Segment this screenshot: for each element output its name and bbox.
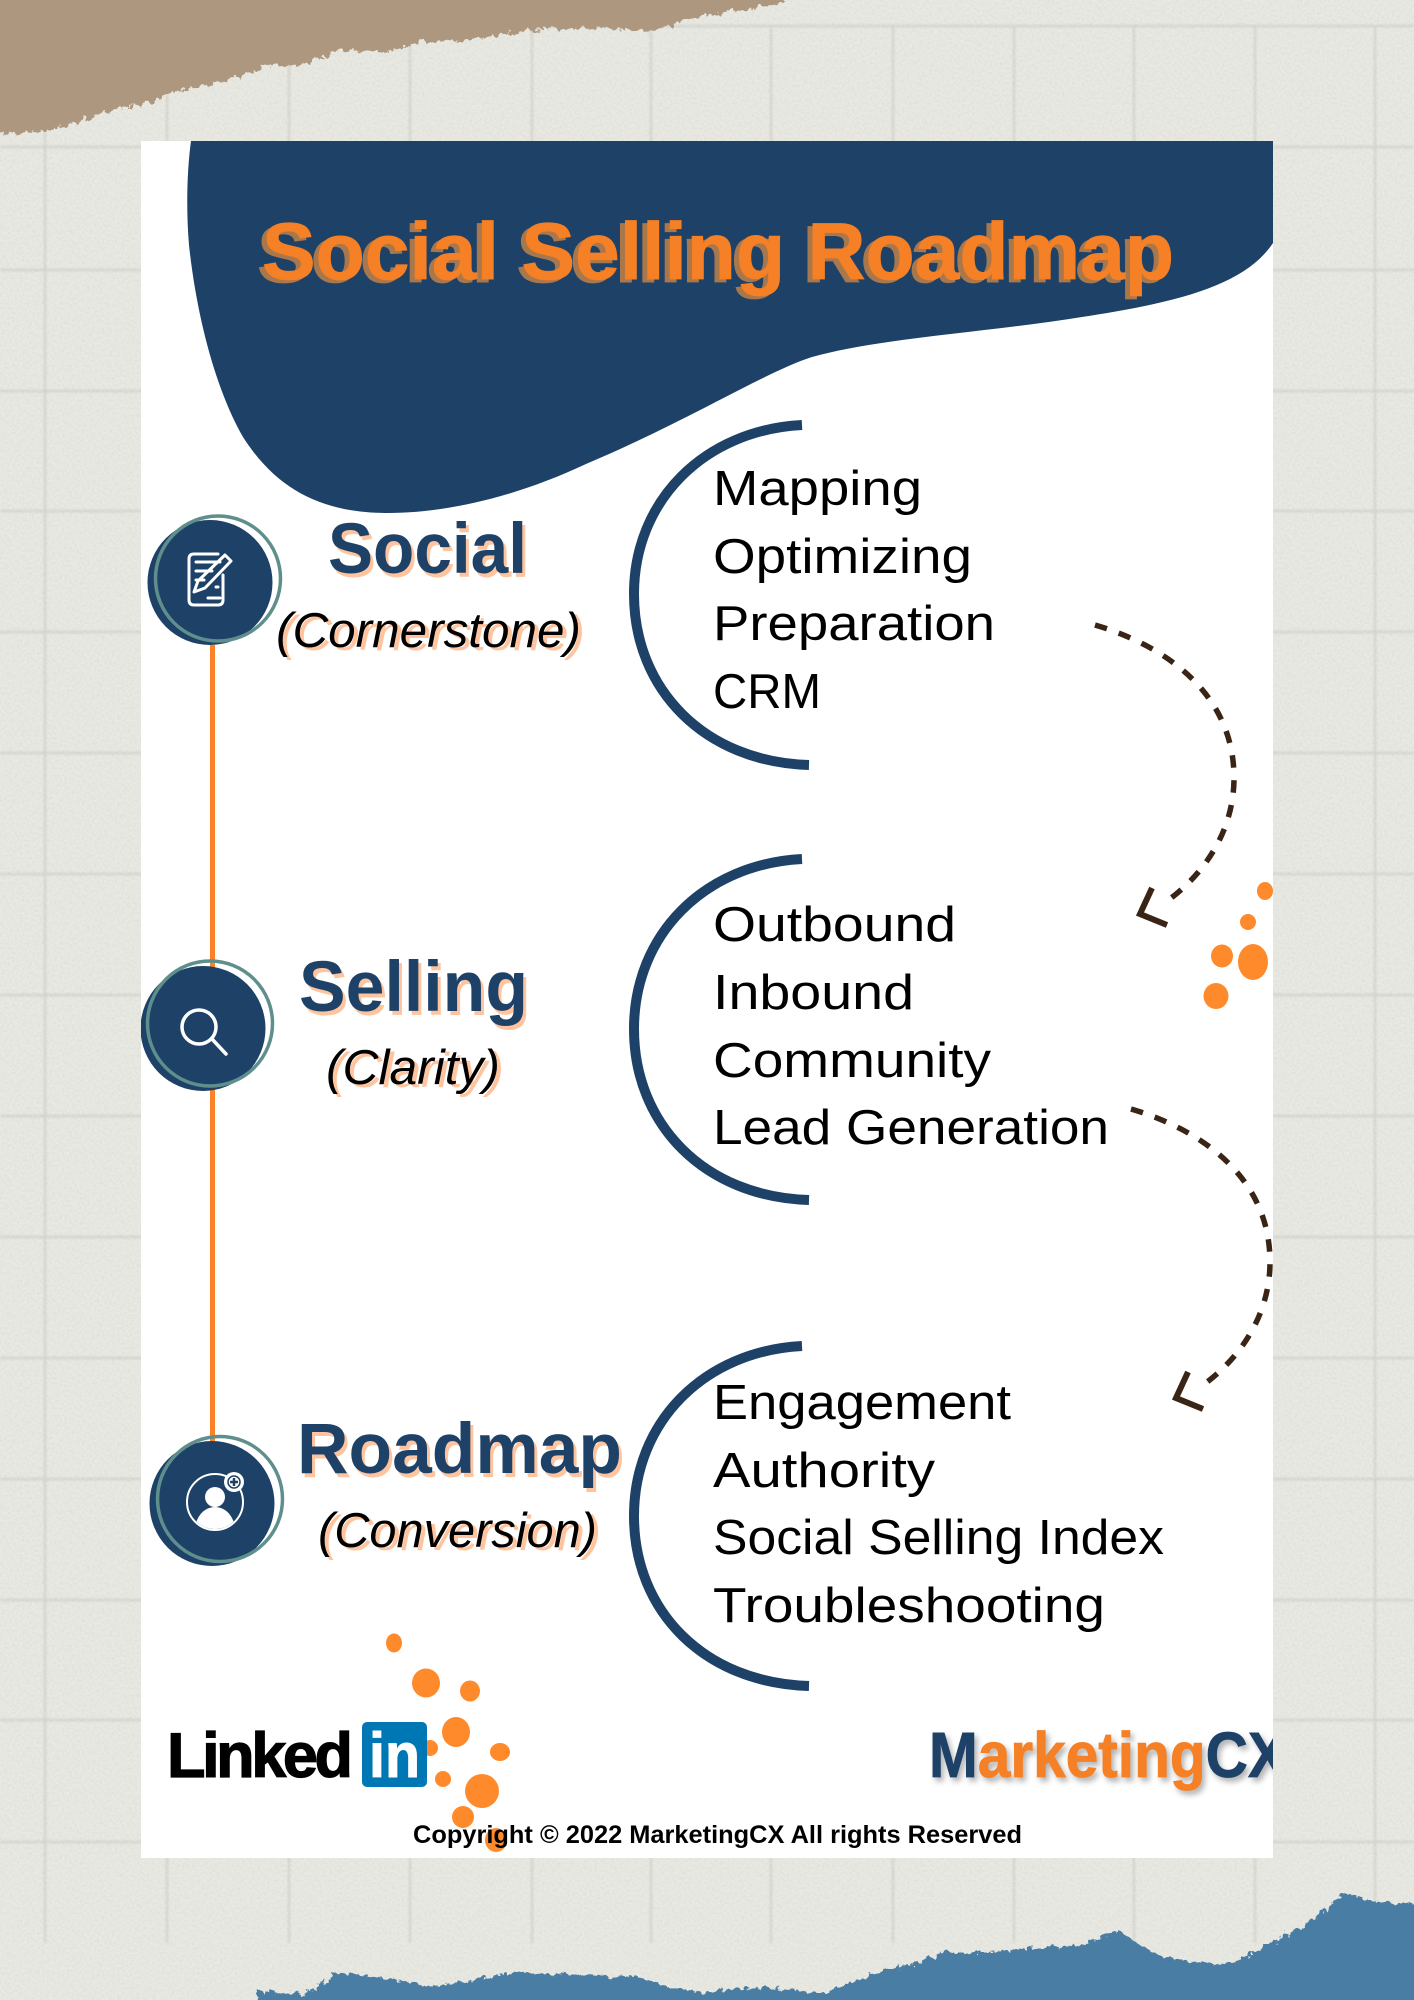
icon: notepad and pen (189, 554, 231, 605)
white panel (141, 141, 1273, 1858)
icon disc: roadmap (150, 1441, 274, 1566)
subheading: conversion: (Conversion) (318, 1504, 597, 1558)
logo: LinkedIn: in (369, 1721, 420, 1791)
list: roadmap items: Engagement (713, 1376, 1011, 1430)
list: roadmap items: Authority (713, 1444, 936, 1498)
icon: user with plus badge (186, 1472, 244, 1531)
heading: roadmap: Roadmap (297, 1410, 622, 1489)
icon disc: social (148, 520, 272, 645)
orange dots, bottom left (386, 1634, 510, 1852)
list: selling items (713, 898, 1109, 1155)
copyright: Copyright © 2022 MarketingCX All rights Reserved (413, 1821, 1022, 1849)
node: roadmap (150, 1436, 282, 1566)
ring: social (156, 516, 280, 641)
orange dots, right side (1204, 882, 1273, 1009)
list: social items: Mapping (713, 462, 922, 516)
list: roadmap items: Troubleshooting (713, 1579, 1105, 1633)
node: social (148, 516, 280, 645)
icon: magnifying glass (182, 1010, 226, 1054)
logo: LinkedIn: Linked (167, 1721, 353, 1791)
timeline connector line (210, 645, 215, 1441)
list: social items: Optimizing (713, 530, 972, 584)
navy header blob (187, 141, 1273, 513)
list: roadmap items: Social Selling Index (713, 1511, 1164, 1565)
subheading: clarity: (Clarity) (326, 1041, 500, 1095)
arc bracket: selling (634, 859, 809, 1200)
heading: social: Social (328, 510, 527, 589)
list: selling items: Community (713, 1034, 992, 1088)
arc bracket: roadmap (634, 1346, 809, 1686)
heading: selling: Selling (299, 948, 528, 1027)
torn brown paper, top left (0, 0, 795, 134)
list: roadmap items (713, 1376, 1164, 1633)
list: selling items: Lead Generation (713, 1101, 1109, 1155)
ring: roadmap (158, 1436, 282, 1562)
list: social items: Preparation (713, 597, 995, 651)
title: Social Selling Roadmap (262, 207, 1174, 297)
logo: MarketingCX: MarketingCX (929, 1719, 1287, 1791)
ring: selling (148, 961, 272, 1086)
icon disc: selling (140, 966, 266, 1091)
arrow: social to selling (1095, 625, 1234, 925)
list: selling items: Inbound (713, 966, 914, 1020)
list: social items: CRM (713, 665, 821, 719)
torn blue paper, bottom right (257, 1893, 1414, 2000)
list: selling items: Outbound (713, 898, 956, 952)
arc bracket: social (634, 425, 809, 765)
list: social items (713, 462, 995, 719)
arrow: selling to roadmap (1131, 1109, 1270, 1409)
node: selling (140, 961, 272, 1091)
subheading: cornerstone: (Cornerstone) (276, 604, 581, 658)
